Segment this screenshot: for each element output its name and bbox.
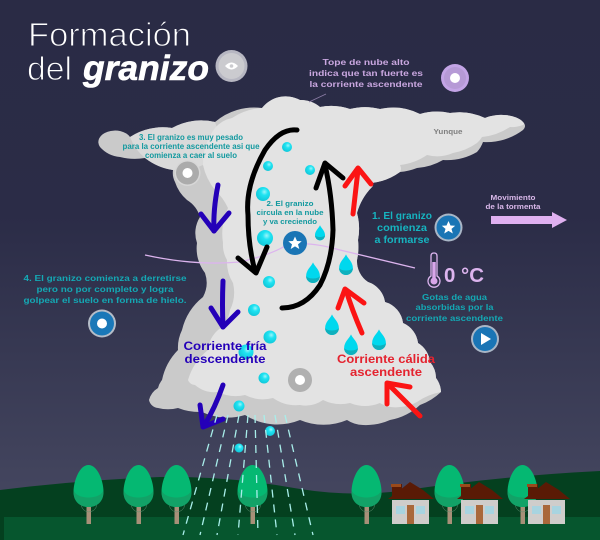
- droplets text: absorbidas por la: [416, 303, 494, 312]
- ground hills: [0, 471, 600, 540]
- cloud mid tone lobe: [130, 120, 225, 170]
- movement label: [486, 193, 541, 211]
- movement label: de la tormenta: [486, 202, 541, 211]
- step 2 text: [256, 199, 324, 226]
- step 3 text: para la corriente ascendente asi que: [122, 142, 260, 151]
- arrow: storm movement: [491, 212, 567, 228]
- label: 0 °C: 0 °C: [444, 265, 484, 287]
- title: del: [27, 50, 72, 87]
- step 1 text: comienza: [377, 222, 427, 234]
- step 3 text: [122, 133, 260, 160]
- label: warm updraft: ascendente: [350, 365, 422, 379]
- title: granizo: [82, 49, 209, 88]
- trees: [74, 465, 538, 524]
- step 4 text: [24, 273, 187, 305]
- step 3 text: comienza a caer al suelo: [145, 151, 237, 160]
- icon: marker in cloud: [288, 368, 312, 392]
- blue downdraft arrows: [200, 185, 238, 427]
- step 2 text: y va creciendo: [263, 217, 317, 226]
- droplets text: Gotas de agua: [422, 293, 488, 302]
- cloud lit side: [188, 96, 524, 407]
- callout: cloud top: Tope de nube alto: [322, 57, 410, 67]
- step 4 text: pero no por completo y logra: [36, 284, 174, 294]
- label: warm updraft: [337, 352, 435, 379]
- rain: [183, 415, 313, 535]
- icon: purple marker: [441, 64, 469, 92]
- callout: cloud top: [309, 57, 423, 89]
- icon: thermometer: [428, 253, 440, 287]
- icon: marker 3: [174, 160, 200, 186]
- label: warm updraft: Corriente cálida: [337, 352, 435, 366]
- leader line: [309, 94, 326, 102]
- step 1 text: a formarse: [374, 234, 430, 246]
- icon: eye: [216, 50, 248, 82]
- movement label: Movimiento: [490, 193, 536, 202]
- hailstones: [234, 142, 315, 452]
- black circulation arrows: [238, 130, 343, 308]
- houses: [388, 482, 570, 524]
- temperature line: [145, 244, 415, 268]
- cloud shadow: [98, 96, 525, 425]
- step 2 text: 2. El granizo: [266, 199, 314, 208]
- callout: cloud top: la corriente ascendente: [310, 79, 423, 89]
- storm cloud: [98, 96, 525, 425]
- icon: marker 4: [88, 310, 116, 338]
- step 1 text: [372, 210, 432, 246]
- label: cold downdraft: [184, 339, 267, 366]
- step 2 text: circula en la nube: [256, 208, 324, 217]
- icon: star marker: [434, 214, 462, 242]
- callout: cloud top: indica que tan fuerte es: [309, 68, 423, 78]
- title: [27, 16, 209, 88]
- label: Yunque: Yunque: [434, 127, 462, 136]
- step 3 text: 3. El granizo es muy pesado: [139, 133, 243, 142]
- icon: play marker: [471, 325, 499, 353]
- step 4 text: 4. El granizo comienza a derretirse: [24, 273, 187, 283]
- title: Formación: [28, 16, 191, 53]
- label: cold downdraft: descendente: [184, 352, 266, 366]
- water drops: [306, 225, 386, 355]
- icon: star in cloud: [283, 231, 307, 255]
- droplets text: [406, 293, 504, 323]
- step 1 text: 1. El granizo: [372, 210, 432, 222]
- droplets text: corriente ascendente: [406, 314, 504, 323]
- label: cold downdraft: Corriente fría: [184, 339, 267, 353]
- step 4 text: golpear el suelo en forma de hielo.: [24, 295, 186, 305]
- red updraft arrows: [338, 168, 420, 416]
